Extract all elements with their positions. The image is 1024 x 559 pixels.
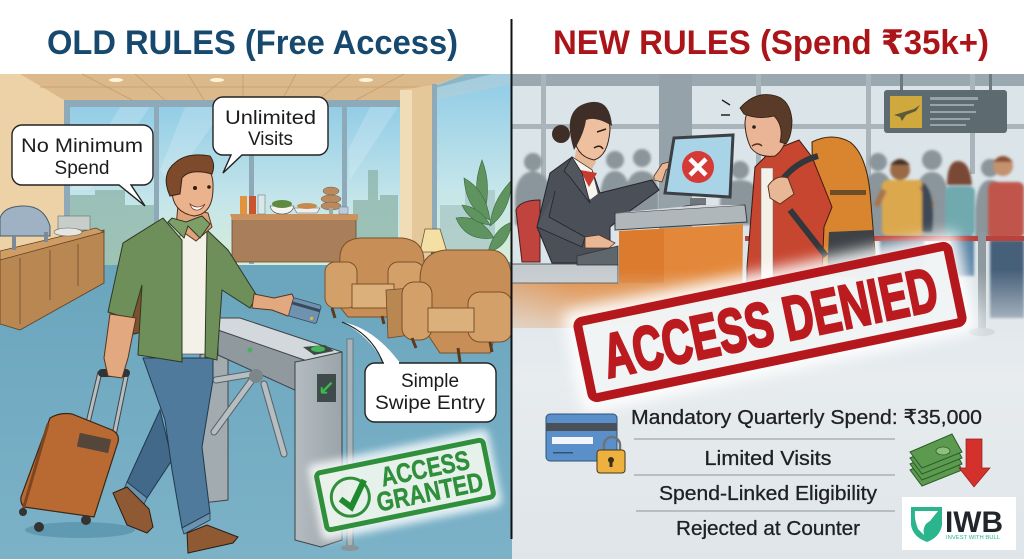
airport background <box>512 74 1024 559</box>
flight information sign <box>884 90 1007 133</box>
limited visits: Limited Visits <box>704 447 832 470</box>
logo: IWB invest with bull: INVEST WITH BULL <box>946 535 1000 541</box>
service counter with chafing dish <box>0 206 104 330</box>
speech bubble: unlimited visits: Unlimited <box>225 108 316 129</box>
jeans <box>127 358 213 528</box>
stamp: access granted: GRANTED <box>374 467 486 518</box>
panel: new rules airport scene <box>512 74 1024 559</box>
backpack <box>115 226 157 335</box>
armchair back <box>325 238 424 324</box>
logo: IWB invest with bull <box>902 497 1016 550</box>
speech bubble: simple swipe entry <box>342 322 496 422</box>
backpack <box>812 137 875 280</box>
arms and hands <box>104 294 298 378</box>
head <box>166 155 214 241</box>
white shirt <box>180 232 208 354</box>
receptionist <box>537 102 682 263</box>
floor lamp <box>420 229 447 282</box>
red chair <box>516 200 540 262</box>
speech bubble: no minimum spend: Spend <box>55 158 109 179</box>
worried traveller with backpack <box>721 94 875 303</box>
collar <box>168 216 210 238</box>
queue of blurred travellers <box>876 156 1024 318</box>
speech bubble: simple swipe entry: Simple <box>401 371 459 392</box>
icon: credit card with padlock <box>546 414 625 473</box>
white shirt <box>761 168 773 283</box>
monitor with red cross <box>665 135 733 210</box>
buffet table with snacks <box>230 187 358 262</box>
speech bubble: no minimum spend: No Minimum <box>21 136 143 157</box>
stamp: access granted <box>307 428 503 542</box>
post <box>341 339 359 551</box>
lower fade <box>512 270 1024 370</box>
orange desk <box>615 205 747 325</box>
title: new rules: NEW RULES (Spend ₹35k+) <box>553 24 989 62</box>
traveller with suitcase swiping card <box>19 155 321 553</box>
check mark icon <box>328 475 373 520</box>
suitcase <box>19 369 135 538</box>
armchair front <box>402 250 512 362</box>
rejected: Rejected at Counter <box>676 517 860 540</box>
head <box>721 94 792 156</box>
speech bubble: simple swipe entry: Swipe Entry <box>375 393 486 414</box>
plant <box>456 160 512 252</box>
turnstile gate: ↙ <box>318 378 335 400</box>
suit <box>537 157 659 263</box>
logo: IWB invest with bull: IWB <box>945 506 1003 539</box>
title: old rules: OLD RULES (Free Access) <box>47 24 458 62</box>
side table <box>386 288 410 338</box>
credit card <box>288 298 321 324</box>
shoes <box>113 487 238 553</box>
turnstile gate <box>200 318 342 547</box>
lower background <box>512 370 1024 559</box>
icon: money stack with down arrow <box>910 434 990 487</box>
jeans cuffs <box>124 482 210 534</box>
eligibility: Spend-Linked Eligibility <box>659 482 878 505</box>
panel: old rules lounge scene <box>0 74 512 559</box>
back counter <box>512 246 712 328</box>
speech bubble: no minimum spend <box>12 125 153 206</box>
center divider <box>510 19 512 539</box>
speech bubble: unlimited visits: Visits <box>248 129 293 150</box>
mandatory spend: Mandatory Quarterly Spend: ₹35,000 <box>631 406 982 429</box>
backpack strap <box>782 156 826 256</box>
red cross icon <box>682 151 714 183</box>
hand <box>768 177 794 204</box>
red jacket <box>747 140 832 303</box>
green jacket <box>108 218 257 362</box>
spending requirements list <box>631 406 982 540</box>
stamp: access granted: ACCESS <box>378 445 472 492</box>
lounge room background <box>0 74 512 559</box>
rope barrier <box>745 232 1024 336</box>
speech bubble: unlimited visits <box>213 97 328 173</box>
